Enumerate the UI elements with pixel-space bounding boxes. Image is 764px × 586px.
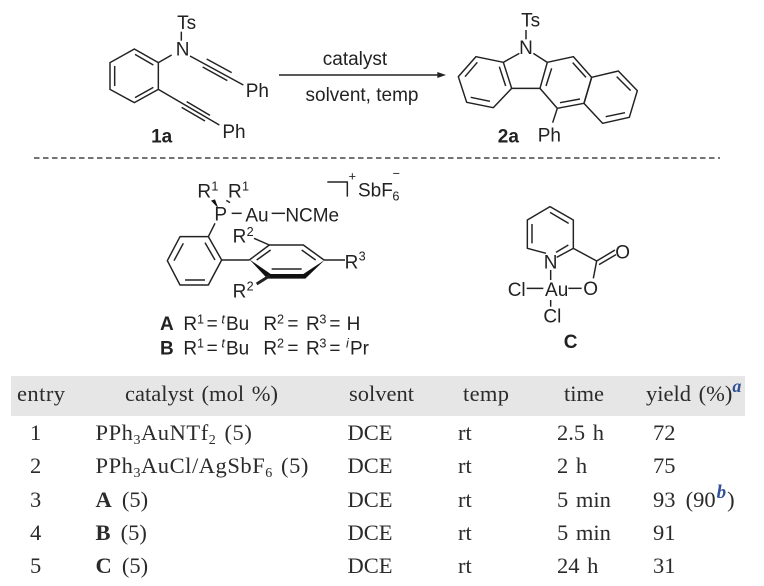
table row 5 xyxy=(30,553,676,578)
table row 4: 5 min xyxy=(557,520,611,545)
molecule: gold catalysts A and B: Au xyxy=(245,205,269,226)
table row 5: DCE xyxy=(348,553,392,578)
table row 1: 2.5 h xyxy=(557,420,604,445)
table row 1: 2 xyxy=(209,433,216,448)
catalyst legend: A and B definitions xyxy=(160,312,369,359)
table row 3: rt xyxy=(458,487,472,512)
catalyst legend: A and B definitions: = xyxy=(287,314,298,335)
molecule: product 2a xyxy=(458,10,637,148)
molecule: gold catalyst C: O xyxy=(615,242,630,263)
catalyst legend: A and B definitions: R xyxy=(306,314,320,335)
table header labels: catalyst (mol %) xyxy=(125,381,278,406)
table row 3: 3 xyxy=(30,487,41,512)
molecule: gold catalysts A and B: R xyxy=(228,181,242,202)
molecule: gold catalysts A and B: R xyxy=(197,181,211,202)
molecule: product 2a: 2a xyxy=(498,127,519,148)
molecule: substrate 1a xyxy=(110,13,269,148)
molecule: gold catalysts A and B: SbF xyxy=(358,181,393,202)
molecule: product 2a: Ph xyxy=(538,126,561,147)
table row 5: C (5) xyxy=(96,553,148,578)
table header labels: entry xyxy=(17,381,66,406)
catalyst legend: A and B definitions: Bu xyxy=(226,338,249,359)
molecule: gold catalysts A and B: R xyxy=(233,227,246,248)
molecule: substrate 1a: Ts xyxy=(177,13,196,34)
catalyst legend: A and B definitions: t xyxy=(221,337,225,351)
molecule: gold catalyst C: Au xyxy=(545,280,568,301)
molecule: product 2a: N xyxy=(519,38,533,59)
table row 1: rt xyxy=(458,420,472,445)
table row 4: DCE xyxy=(348,520,392,545)
table row 1: (5) xyxy=(216,420,252,445)
dashed divider xyxy=(34,157,720,159)
molecule: gold catalyst C: N xyxy=(544,253,558,274)
table row 2: rt xyxy=(458,453,472,478)
catalyst legend: A and B definitions: = xyxy=(207,314,218,335)
table row 4: 91 xyxy=(653,520,676,545)
catalyst legend: A and B definitions: 2 xyxy=(277,337,284,351)
catalyst legend: A and B definitions: i xyxy=(346,337,350,351)
table row 1: DCE xyxy=(348,420,392,445)
table row 4: B (5) xyxy=(96,520,147,545)
reaction arrow with conditions: catalyst xyxy=(323,49,388,70)
table row 3 xyxy=(30,482,735,512)
molecule: gold catalyst C: C xyxy=(564,332,578,353)
catalyst legend: A and B definitions: = xyxy=(329,338,340,359)
table header labels: temp xyxy=(463,381,509,406)
table row 4: 4 xyxy=(30,520,41,545)
catalyst legend: A and B definitions: Bu xyxy=(226,314,249,335)
molecule: substrate 1a: N xyxy=(176,40,190,61)
catalyst legend: A and B definitions: A xyxy=(160,314,174,335)
table row 5: rt xyxy=(458,553,472,578)
molecule: substrate 1a: 1a xyxy=(151,127,173,148)
catalyst legend: A and B definitions: t xyxy=(221,312,225,326)
catalyst legend: A and B definitions: Pr xyxy=(350,338,369,359)
catalyst legend: A and B definitions: 1 xyxy=(197,337,204,351)
table row 4: rt xyxy=(458,520,472,545)
molecule: gold catalyst C: Cl xyxy=(543,307,561,328)
catalyst legend: A and B definitions: R xyxy=(263,338,277,359)
catalyst legend: A and B definitions: R xyxy=(306,338,320,359)
molecule: gold catalyst C xyxy=(508,207,630,353)
table row 3: 93 (90 xyxy=(653,487,716,512)
molecule: gold catalyst C: Cl xyxy=(508,280,526,301)
table row 1 xyxy=(30,420,676,448)
molecule: product 2a: Ts xyxy=(521,10,540,31)
catalyst legend: A and B definitions: 3 xyxy=(319,312,326,326)
catalyst legend: A and B definitions: R xyxy=(183,338,197,359)
molecule: gold catalysts A and B: R xyxy=(345,252,358,273)
catalyst legend: A and B definitions: = xyxy=(207,338,218,359)
table row 1: 72 xyxy=(653,420,676,445)
table row 3: 5 min xyxy=(557,487,611,512)
molecule: gold catalysts A and B: R xyxy=(233,281,246,302)
table row 1: AuNTf xyxy=(141,420,209,445)
molecule: gold catalysts A and B: 2 xyxy=(247,280,254,294)
table row 5: 31 xyxy=(653,553,676,578)
table row 3: A (5) xyxy=(96,487,148,512)
catalyst legend: A and B definitions: 2 xyxy=(277,312,284,326)
catalyst legend: A and B definitions: R xyxy=(183,314,197,335)
table row 3: ) xyxy=(727,487,735,512)
molecule: substrate 1a: Ph xyxy=(246,81,269,102)
catalyst legend: A and B definitions: = xyxy=(287,338,298,359)
reaction arrow with conditions: solvent, temp xyxy=(306,85,418,106)
molecule: gold catalysts A and B xyxy=(167,166,400,302)
table header labels: a xyxy=(732,376,741,396)
table row 2: 2 xyxy=(30,453,41,478)
molecule: substrate 1a: Ph xyxy=(222,122,246,143)
molecule: gold catalysts A and B: − xyxy=(393,166,400,180)
table header band xyxy=(11,376,745,416)
table row 1: 1 xyxy=(30,420,41,445)
table row 2: 2 h xyxy=(557,453,587,478)
molecule: gold catalysts A and B: 3 xyxy=(359,250,366,264)
molecule: gold catalyst C: O xyxy=(583,279,598,300)
table row 2: (5) xyxy=(273,453,309,478)
table row 2: AuCl/AgSbF xyxy=(141,453,265,478)
reaction arrow with conditions xyxy=(279,49,446,106)
table row 3: DCE xyxy=(348,487,392,512)
table row 2 xyxy=(30,453,676,481)
molecule: gold catalysts A and B: P xyxy=(214,205,227,226)
table row 2: 6 xyxy=(265,466,273,481)
table header labels: time xyxy=(564,381,604,406)
table row 2: DCE xyxy=(348,453,392,478)
table row 2: 75 xyxy=(653,453,676,478)
table header labels: solvent xyxy=(349,381,415,406)
molecule: gold catalysts A and B: + xyxy=(349,170,356,184)
table row 4 xyxy=(30,520,676,545)
molecule: gold catalysts A and B: 2 xyxy=(247,225,254,239)
table row 1: PPh xyxy=(96,420,133,445)
table row 2: PPh xyxy=(96,453,133,478)
table header labels xyxy=(17,376,741,406)
catalyst legend: A and B definitions: 3 xyxy=(319,337,326,351)
table row 5: 5 xyxy=(30,553,41,578)
table row 5: 24 h xyxy=(557,553,598,578)
catalyst legend: A and B definitions: 1 xyxy=(197,312,204,326)
molecule: gold catalysts A and B: 1 xyxy=(211,180,218,194)
molecule: gold catalysts A and B: 1 xyxy=(242,180,249,194)
molecule: gold catalysts A and B: 6 xyxy=(392,190,399,204)
catalyst legend: A and B definitions: = xyxy=(329,314,340,335)
catalyst legend: A and B definitions: B xyxy=(160,338,174,359)
table row 2: 3 xyxy=(133,466,141,481)
molecule: gold catalysts A and B: NCMe xyxy=(285,205,339,226)
table header labels: yield (%) xyxy=(646,381,732,406)
table row 1: 3 xyxy=(133,433,141,448)
table row 3: b xyxy=(717,482,726,503)
catalyst legend: A and B definitions: R xyxy=(263,314,277,335)
catalyst legend: A and B definitions: H xyxy=(347,314,360,335)
